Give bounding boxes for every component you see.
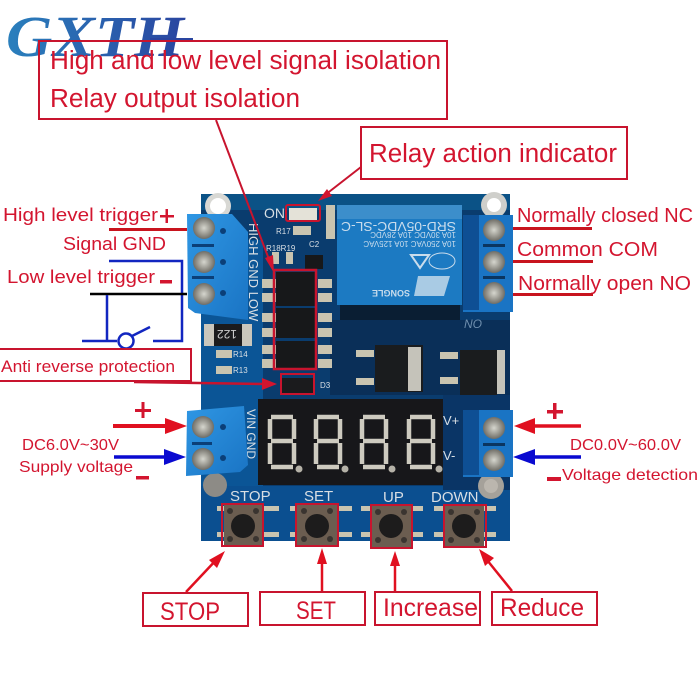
arrow: relay indicator [318, 167, 361, 201]
button: SET label: SET [296, 597, 336, 625]
plus sign: detection [547, 403, 563, 419]
silkscreen labels: SET [304, 488, 333, 505]
silkscreen labels: R14 [233, 350, 248, 359]
label: low level trigger: Low level trigger [7, 266, 155, 287]
arrow: SET [317, 548, 327, 591]
relay: 10A 250VAC 10A 125VAC [363, 239, 456, 248]
silkscreen labels: R13 [233, 366, 248, 375]
diode D3 [282, 378, 314, 393]
diode highlight [281, 374, 314, 394]
switch wiring [82, 261, 187, 348]
button highlights [222, 504, 486, 548]
button: STOP label [143, 593, 248, 626]
label: supply voltage: Supply voltage [19, 459, 133, 476]
circuit board [201, 192, 510, 547]
silkscreen labels [230, 205, 482, 506]
terminal block: voltage detection [463, 410, 513, 477]
label: normally open: Normally open NO [518, 273, 691, 295]
optocoupler highlight [274, 270, 316, 369]
arrow: Increase [390, 551, 400, 591]
button: STOP label: STOP [160, 598, 220, 626]
callout: anti reverse protection [0, 349, 191, 381]
label: voltage detection [547, 437, 698, 484]
label: supply voltage [19, 437, 149, 480]
relay: SRD-05VDC-SL-C [341, 219, 456, 234]
label: high level trigger: High level trigger [3, 204, 158, 225]
push buttons [217, 505, 496, 547]
button: Reduce label: Reduce [500, 594, 584, 622]
resistor 122 [204, 324, 252, 346]
silkscreen labels: DOWN [431, 489, 478, 506]
terminal block: relay output [463, 215, 513, 312]
silkscreen labels: D3 [320, 381, 331, 390]
arrow: supply negative [114, 449, 186, 465]
arrow: isolation to optocouplers [216, 120, 274, 273]
label: normally closed: Normally closed NC [517, 205, 693, 227]
silkscreen labels: NO [464, 317, 482, 331]
arrow: anti reverse [134, 378, 277, 390]
arrow: detection negative [513, 449, 581, 465]
arrow: Reduce [479, 549, 512, 591]
silkscreen labels: C2 [309, 240, 320, 249]
callout: relay indicator [361, 127, 627, 179]
silkscreen labels: VIN GND [244, 409, 258, 459]
label: signal GND: Signal GND [63, 233, 166, 254]
LED highlight [286, 205, 320, 221]
silkscreen labels: V+ [443, 413, 459, 428]
logo GXTH: GXTH [6, 4, 186, 69]
callout: anti reverse protection: Anti reverse protection [1, 358, 175, 376]
arrow: STOP [186, 551, 225, 592]
relay: 10A 30VDC 10A 28VDC [370, 230, 456, 239]
display [258, 399, 443, 485]
silkscreen labels: R17 [276, 227, 291, 236]
label: common: Common COM [517, 239, 658, 261]
silkscreen labels: ON [264, 205, 285, 221]
label: voltage detection: Voltage detection [562, 467, 698, 484]
arrow: supply positive [113, 418, 187, 434]
silkscreen labels: R18R19 [266, 244, 296, 253]
plus sign: supply [135, 402, 151, 418]
terminal block: trigger input [187, 214, 248, 320]
silkscreen labels: V- [443, 448, 455, 463]
LED [289, 208, 317, 220]
callout: relay indicator: Relay action indicator [369, 140, 618, 168]
small SMD parts [216, 205, 335, 374]
silkscreen labels: UP [383, 489, 404, 506]
relay: SONGLE [372, 288, 410, 298]
callout: signal isolation [39, 41, 447, 119]
silkscreen labels: HIGH GND LOW [246, 223, 261, 322]
optocouplers [276, 255, 323, 369]
relay [337, 205, 462, 320]
button: SET label [260, 592, 365, 625]
label: voltage detection: DC0.0V~60.0V [570, 437, 681, 454]
label: supply voltage: DC6.0V~30V [22, 437, 119, 454]
silkscreen labels: STOP [230, 488, 271, 505]
terminal block: supply [186, 406, 248, 476]
arrow: detection positive [514, 418, 581, 434]
button: Increase label: Increase [383, 594, 478, 622]
resistor 122: 122 [217, 327, 237, 341]
label: high level trigger [3, 204, 187, 231]
callout: signal isolation: Relay output isolation [50, 85, 300, 113]
button: Reduce label [492, 592, 597, 625]
MOSFETs [356, 345, 505, 395]
callout: signal isolation: High and low level signal isolation [50, 47, 441, 75]
